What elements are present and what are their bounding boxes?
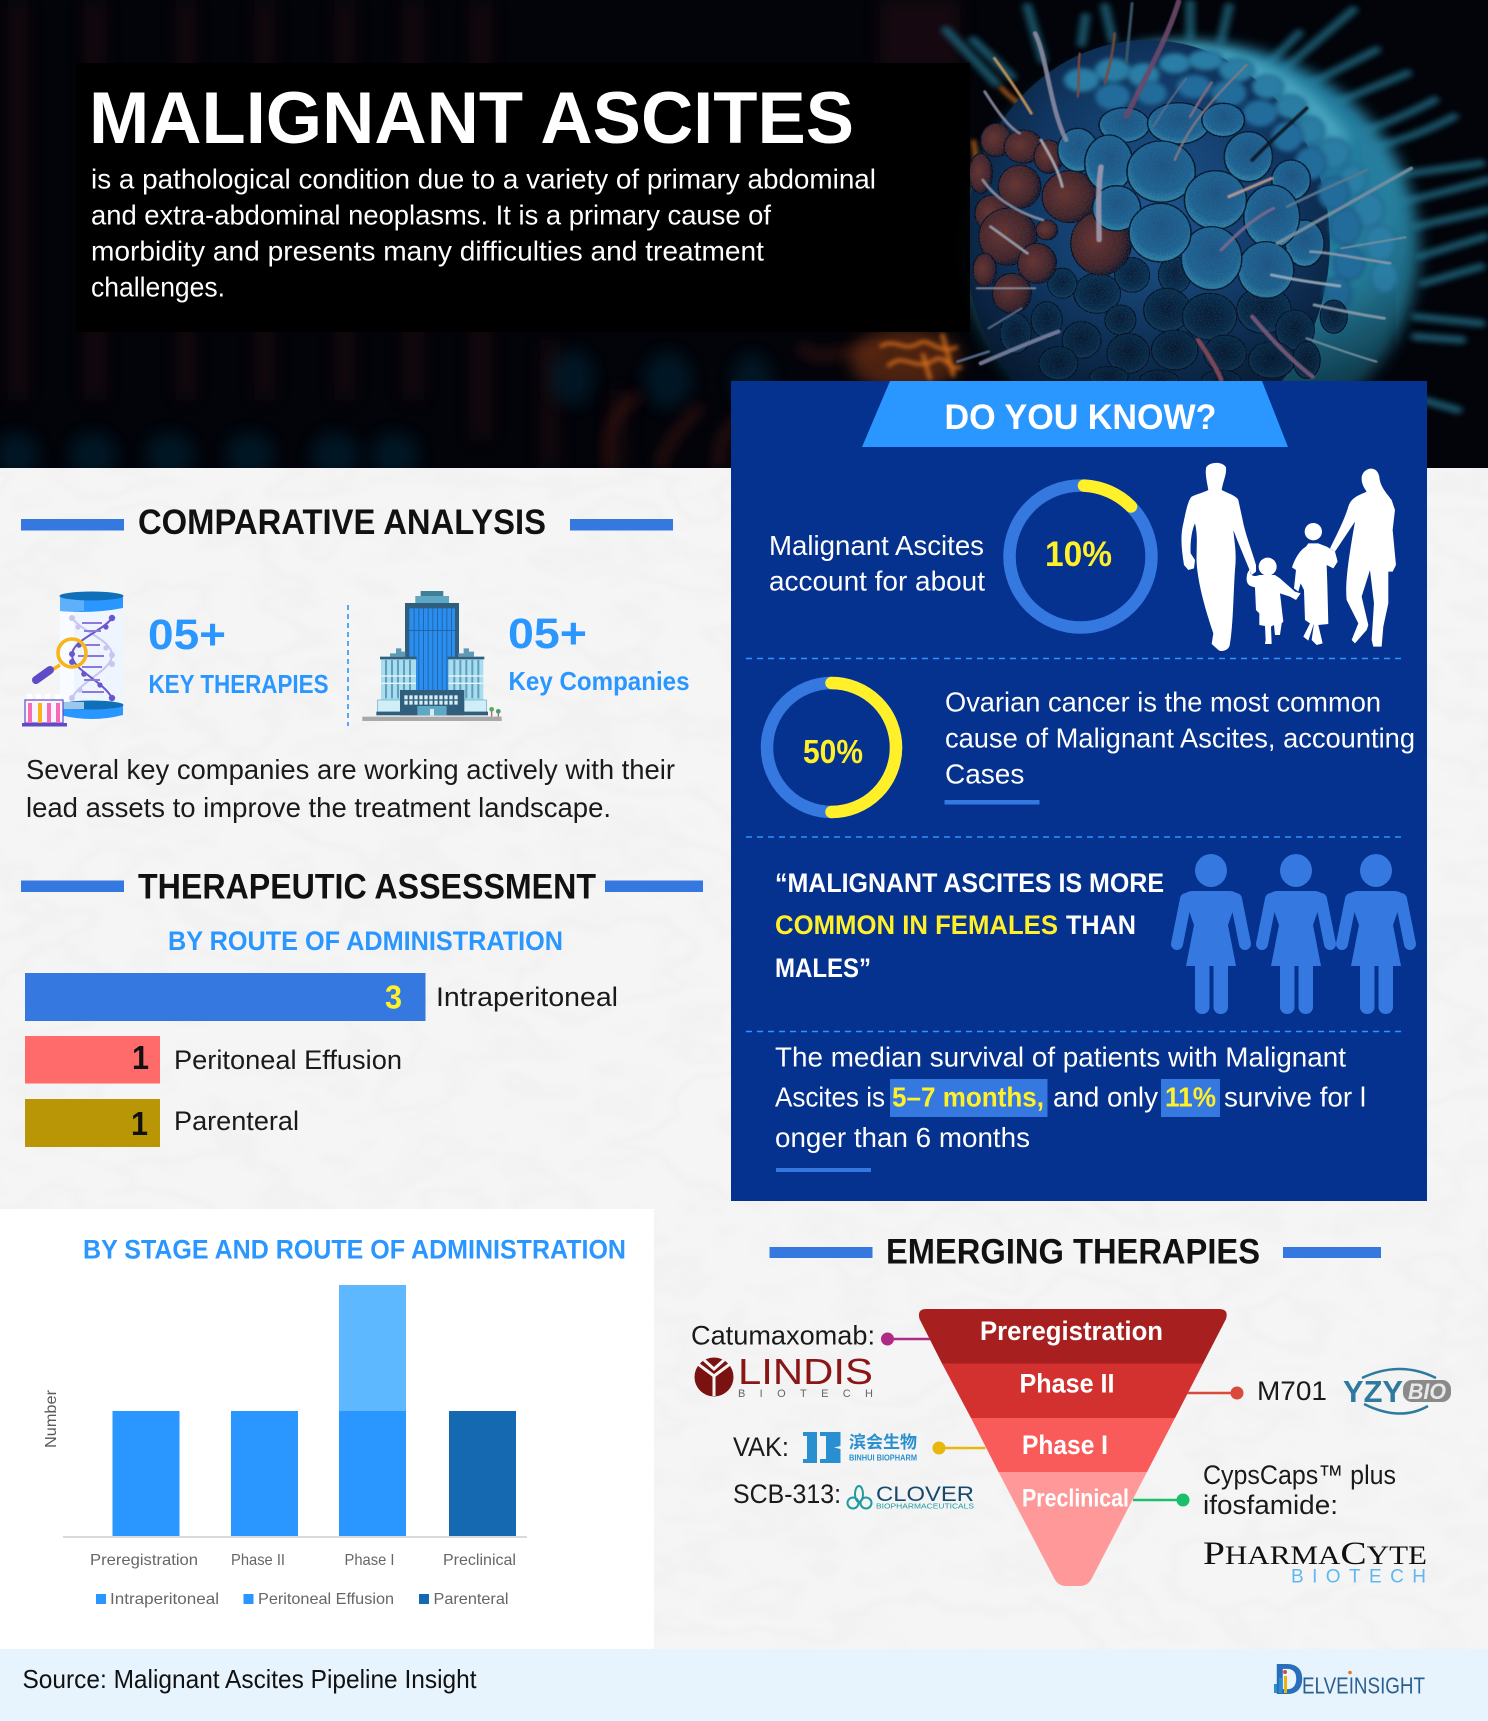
fact: median survival: survive for l xyxy=(1224,1082,1366,1112)
funnel xyxy=(919,1309,1227,1586)
text: ovarian cancer: cause of Malignant Ascites, accounting xyxy=(945,722,1415,754)
logo: Binhui Biopharm: 滨会生物 xyxy=(849,1432,917,1452)
fact: 50 percent xyxy=(767,683,1415,812)
logo: Binhui Biopharm xyxy=(803,1432,917,1463)
bar: parenteral: Parenteral xyxy=(174,1106,299,1136)
icon: family silhouette xyxy=(1181,463,1396,651)
footer xyxy=(0,1649,1488,1721)
funnel: Preclinical xyxy=(1022,1484,1129,1512)
subheading: by route: BY ROUTE OF ADMINISTRATION xyxy=(168,926,563,956)
panel: stacked bar chart xyxy=(0,1209,654,1649)
description text xyxy=(91,164,876,302)
connector: CypsCaps: ifosfamide: xyxy=(1203,1490,1338,1520)
x axis labels: Phase II xyxy=(231,1552,285,1569)
funnel: Phase I xyxy=(1022,1430,1108,1460)
x axis labels: Phase I xyxy=(344,1552,394,1569)
text: ovarian cancer: Cases xyxy=(945,758,1024,790)
ring chart: 10 percent xyxy=(1010,486,1152,628)
description xyxy=(26,754,675,823)
logo: Clover xyxy=(848,1483,974,1510)
banner: do you know xyxy=(862,381,1288,447)
connector: VAK: VAK: xyxy=(733,1432,789,1462)
fact: 10 percent: Malignant Ascites xyxy=(769,530,984,561)
icon: three women xyxy=(1177,854,1410,1014)
legend: Intraperitoneal xyxy=(110,1591,219,1608)
logo: Lindis Biotech: BIOTECH xyxy=(738,1388,873,1400)
connector: CypsCaps: CypsCaps™ plus xyxy=(1203,1460,1396,1490)
connector: M701 xyxy=(1188,1376,1327,1406)
bar: peritoneal effusion: 1 xyxy=(132,1039,149,1076)
fact: more common in females: COMMON IN FEMALES xyxy=(775,910,1058,940)
logo: DelveInsight: ELVEINSIGHT xyxy=(1302,1672,1425,1698)
ring chart: 50 percent: 50% xyxy=(803,733,863,770)
logo: Lindis Biotech: LINDIS xyxy=(738,1351,873,1392)
legend: Parenteral xyxy=(434,1591,508,1608)
fact: more common in females: “MALIGNANT ASCITES IS MORE xyxy=(775,868,1164,898)
logo: PharmaCyte Biotech: BIOTECH xyxy=(1291,1566,1426,1588)
funnel: Preregistration xyxy=(980,1316,1163,1346)
bar: intraperitoneal xyxy=(25,973,618,1021)
logo: Clover: BIOPHARMACEUTICALS xyxy=(876,1502,974,1510)
bar: peritoneal effusion: Peritoneal Effusion xyxy=(174,1045,402,1075)
bars xyxy=(63,1285,527,1538)
logo: PharmaCyte Biotech: PHARMA CYTE xyxy=(1203,1536,1427,1572)
stat: key therapies: KEY THERAPIES xyxy=(148,669,328,699)
panel: comparative analysis xyxy=(21,503,690,823)
fact: median survival: and only xyxy=(1053,1082,1158,1112)
bar: parenteral: 1 xyxy=(131,1105,148,1142)
panel: emerging therapies xyxy=(691,1232,1451,1588)
bar: intraperitoneal: 3 xyxy=(385,978,402,1016)
banner: do you know: DO YOU KNOW? xyxy=(944,398,1216,437)
fact: median survival xyxy=(775,1042,1366,1172)
logo: DelveInsight xyxy=(1274,1655,1425,1704)
stat: key companies: Key Companies xyxy=(508,666,690,696)
fact: median survival: Ascites is xyxy=(775,1082,885,1112)
text: ovarian cancer: Ovarian cancer is the most common xyxy=(945,686,1381,718)
description text: morbidity and presents many difficulties and treatment xyxy=(91,236,764,266)
logo: PharmaCyte Biotech xyxy=(1203,1536,1427,1588)
bar: peritoneal effusion xyxy=(25,1036,402,1084)
stat: key therapies: 05+ xyxy=(148,611,226,659)
legend: Peritoneal Effusion xyxy=(258,1591,394,1608)
fact: median survival: The median survival of patients with Malignant xyxy=(775,1042,1346,1072)
logo: YZY Bio: BIO xyxy=(1408,1379,1446,1404)
stat: key companies: 05+ xyxy=(508,610,587,658)
legend xyxy=(96,1591,508,1608)
connector: catumaxomab: Catumaxomab: xyxy=(691,1320,875,1350)
description text: and extra-abdominal neoplasms. It is a primary cause of xyxy=(91,200,771,230)
text: ovarian cancer xyxy=(945,686,1415,790)
connector: M701: M701 xyxy=(1257,1376,1327,1406)
logo: Clover: CLOVER xyxy=(876,1483,974,1506)
chart title: BY STAGE AND ROUTE OF ADMINISTRATION xyxy=(83,1234,626,1264)
heading: therapeutic assessment: THERAPEUTIC ASSESSMENT xyxy=(138,868,596,906)
ring chart: 50 percent xyxy=(767,683,896,812)
stat: key companies xyxy=(508,610,690,696)
logo: DelveInsight: D xyxy=(1274,1655,1304,1704)
description text: challenges. xyxy=(91,272,225,302)
description: Several key companies are working actively with their xyxy=(26,754,675,785)
logo: YZY Bio: YZY xyxy=(1343,1374,1403,1409)
heading: emerging therapies: EMERGING THERAPIES xyxy=(886,1232,1260,1272)
bar: parenteral xyxy=(25,1099,299,1147)
fact: more common in females: MALES” xyxy=(775,953,871,983)
heading: emerging therapies xyxy=(770,1232,1381,1272)
fact: more common in females: THAN xyxy=(1066,910,1136,940)
fact: median survival: 5–7 months, xyxy=(892,1082,1044,1112)
source line: Source: Malignant Ascites Pipeline Insight xyxy=(22,1664,477,1694)
logo: YZY Bio xyxy=(1343,1369,1451,1414)
x axis labels xyxy=(90,1552,516,1569)
title box xyxy=(76,63,970,332)
panel: therapeutic assessment xyxy=(21,868,703,1147)
logo: Lindis Biotech xyxy=(694,1351,873,1400)
stat: key therapies xyxy=(148,611,328,699)
icon: office building xyxy=(362,591,502,721)
title: MALIGNANT ASCITES xyxy=(89,78,854,159)
label: SCB-313: SCB-313: xyxy=(733,1479,841,1509)
funnel: Phase II xyxy=(1020,1368,1114,1398)
connector: CypsCaps xyxy=(1133,1460,1396,1520)
fact: median survival: 11% xyxy=(1165,1082,1216,1112)
y axis label: Number xyxy=(43,1389,60,1448)
description text: is a pathological condition due to a variety of primary abdominal xyxy=(91,164,876,194)
heading: comparative analysis: COMPARATIVE ANALYSIS xyxy=(138,503,546,542)
x axis labels: Preclinical xyxy=(443,1552,516,1569)
description: lead assets to improve the treatment landscape. xyxy=(26,792,611,823)
hero background with virus image xyxy=(0,0,1488,477)
heading: comparative analysis xyxy=(21,503,673,542)
icon: DNA cylinder with magnifier xyxy=(22,592,124,726)
ring chart: 10 percent: 10% xyxy=(1045,535,1112,574)
fact: median survival: onger than 6 months xyxy=(775,1122,1030,1153)
fact: more common in females xyxy=(775,854,1410,1014)
logo: Binhui Biopharm: BINHUI BIOPHARM xyxy=(849,1452,917,1462)
bar: intraperitoneal: Intraperitoneal xyxy=(436,982,618,1012)
connector: VAK xyxy=(733,1432,986,1462)
fact: 10 percent xyxy=(769,463,1396,651)
x axis labels: Preregistration xyxy=(90,1552,198,1569)
fact: 10 percent: account for about xyxy=(769,566,985,596)
panel: do you know xyxy=(731,381,1427,1201)
